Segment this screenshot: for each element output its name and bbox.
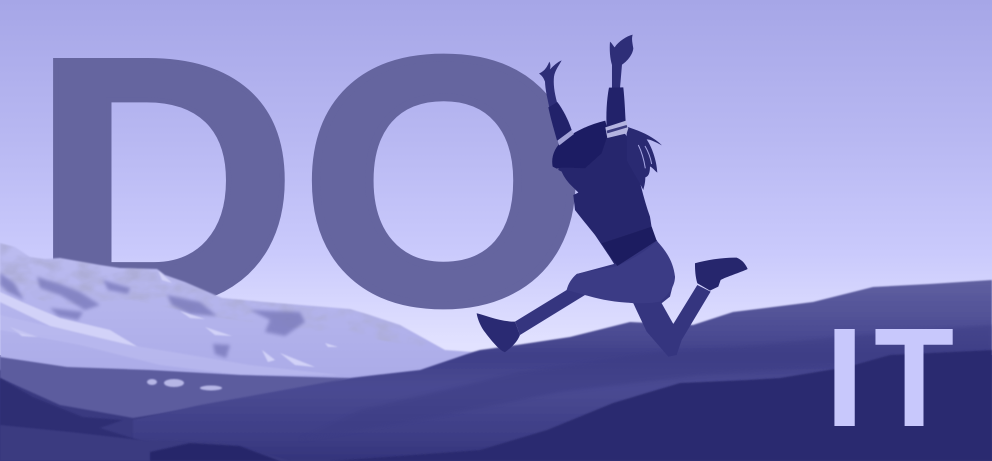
distant ridge and main hill — [133, 280, 992, 461]
light gaps between strands — [638, 145, 652, 168]
torso and head — [558, 127, 657, 268]
waistband — [602, 227, 657, 266]
mid ridge shade — [300, 325, 992, 440]
left foreground hill — [0, 378, 280, 461]
right sleeve — [606, 87, 626, 128]
left sleeve — [548, 102, 572, 142]
front shoe — [477, 313, 520, 352]
jeans — [567, 241, 675, 303]
dark rock patches — [0, 273, 305, 358]
hair — [552, 121, 608, 169]
valley band — [0, 357, 350, 418]
leg backing — [515, 240, 711, 357]
elbow stripe — [557, 130, 574, 145]
foreground ground shading — [0, 425, 290, 461]
raised arm left — [539, 60, 562, 107]
base ground — [0, 355, 992, 461]
headline word: DO — [31, 0, 587, 379]
hair strands — [627, 127, 662, 190]
jumping girl silhouette — [477, 35, 748, 357]
letter I: I — [825, 298, 864, 456]
raised arm right — [610, 35, 633, 88]
back shoe — [695, 258, 748, 291]
sleeve cuff stripe — [605, 121, 628, 138]
dark foreground patch — [150, 443, 280, 461]
mountain body — [0, 243, 473, 400]
rock texture — [0, 243, 440, 350]
snow highlights — [0, 270, 338, 367]
letter T: T — [874, 299, 954, 456]
valley snow patches — [147, 379, 222, 390]
front dark hill — [330, 350, 992, 461]
lower snow slope — [0, 315, 340, 375]
word: IT — [825, 298, 954, 456]
snowy mountain — [0, 243, 473, 400]
cuff dark band — [607, 125, 627, 133]
